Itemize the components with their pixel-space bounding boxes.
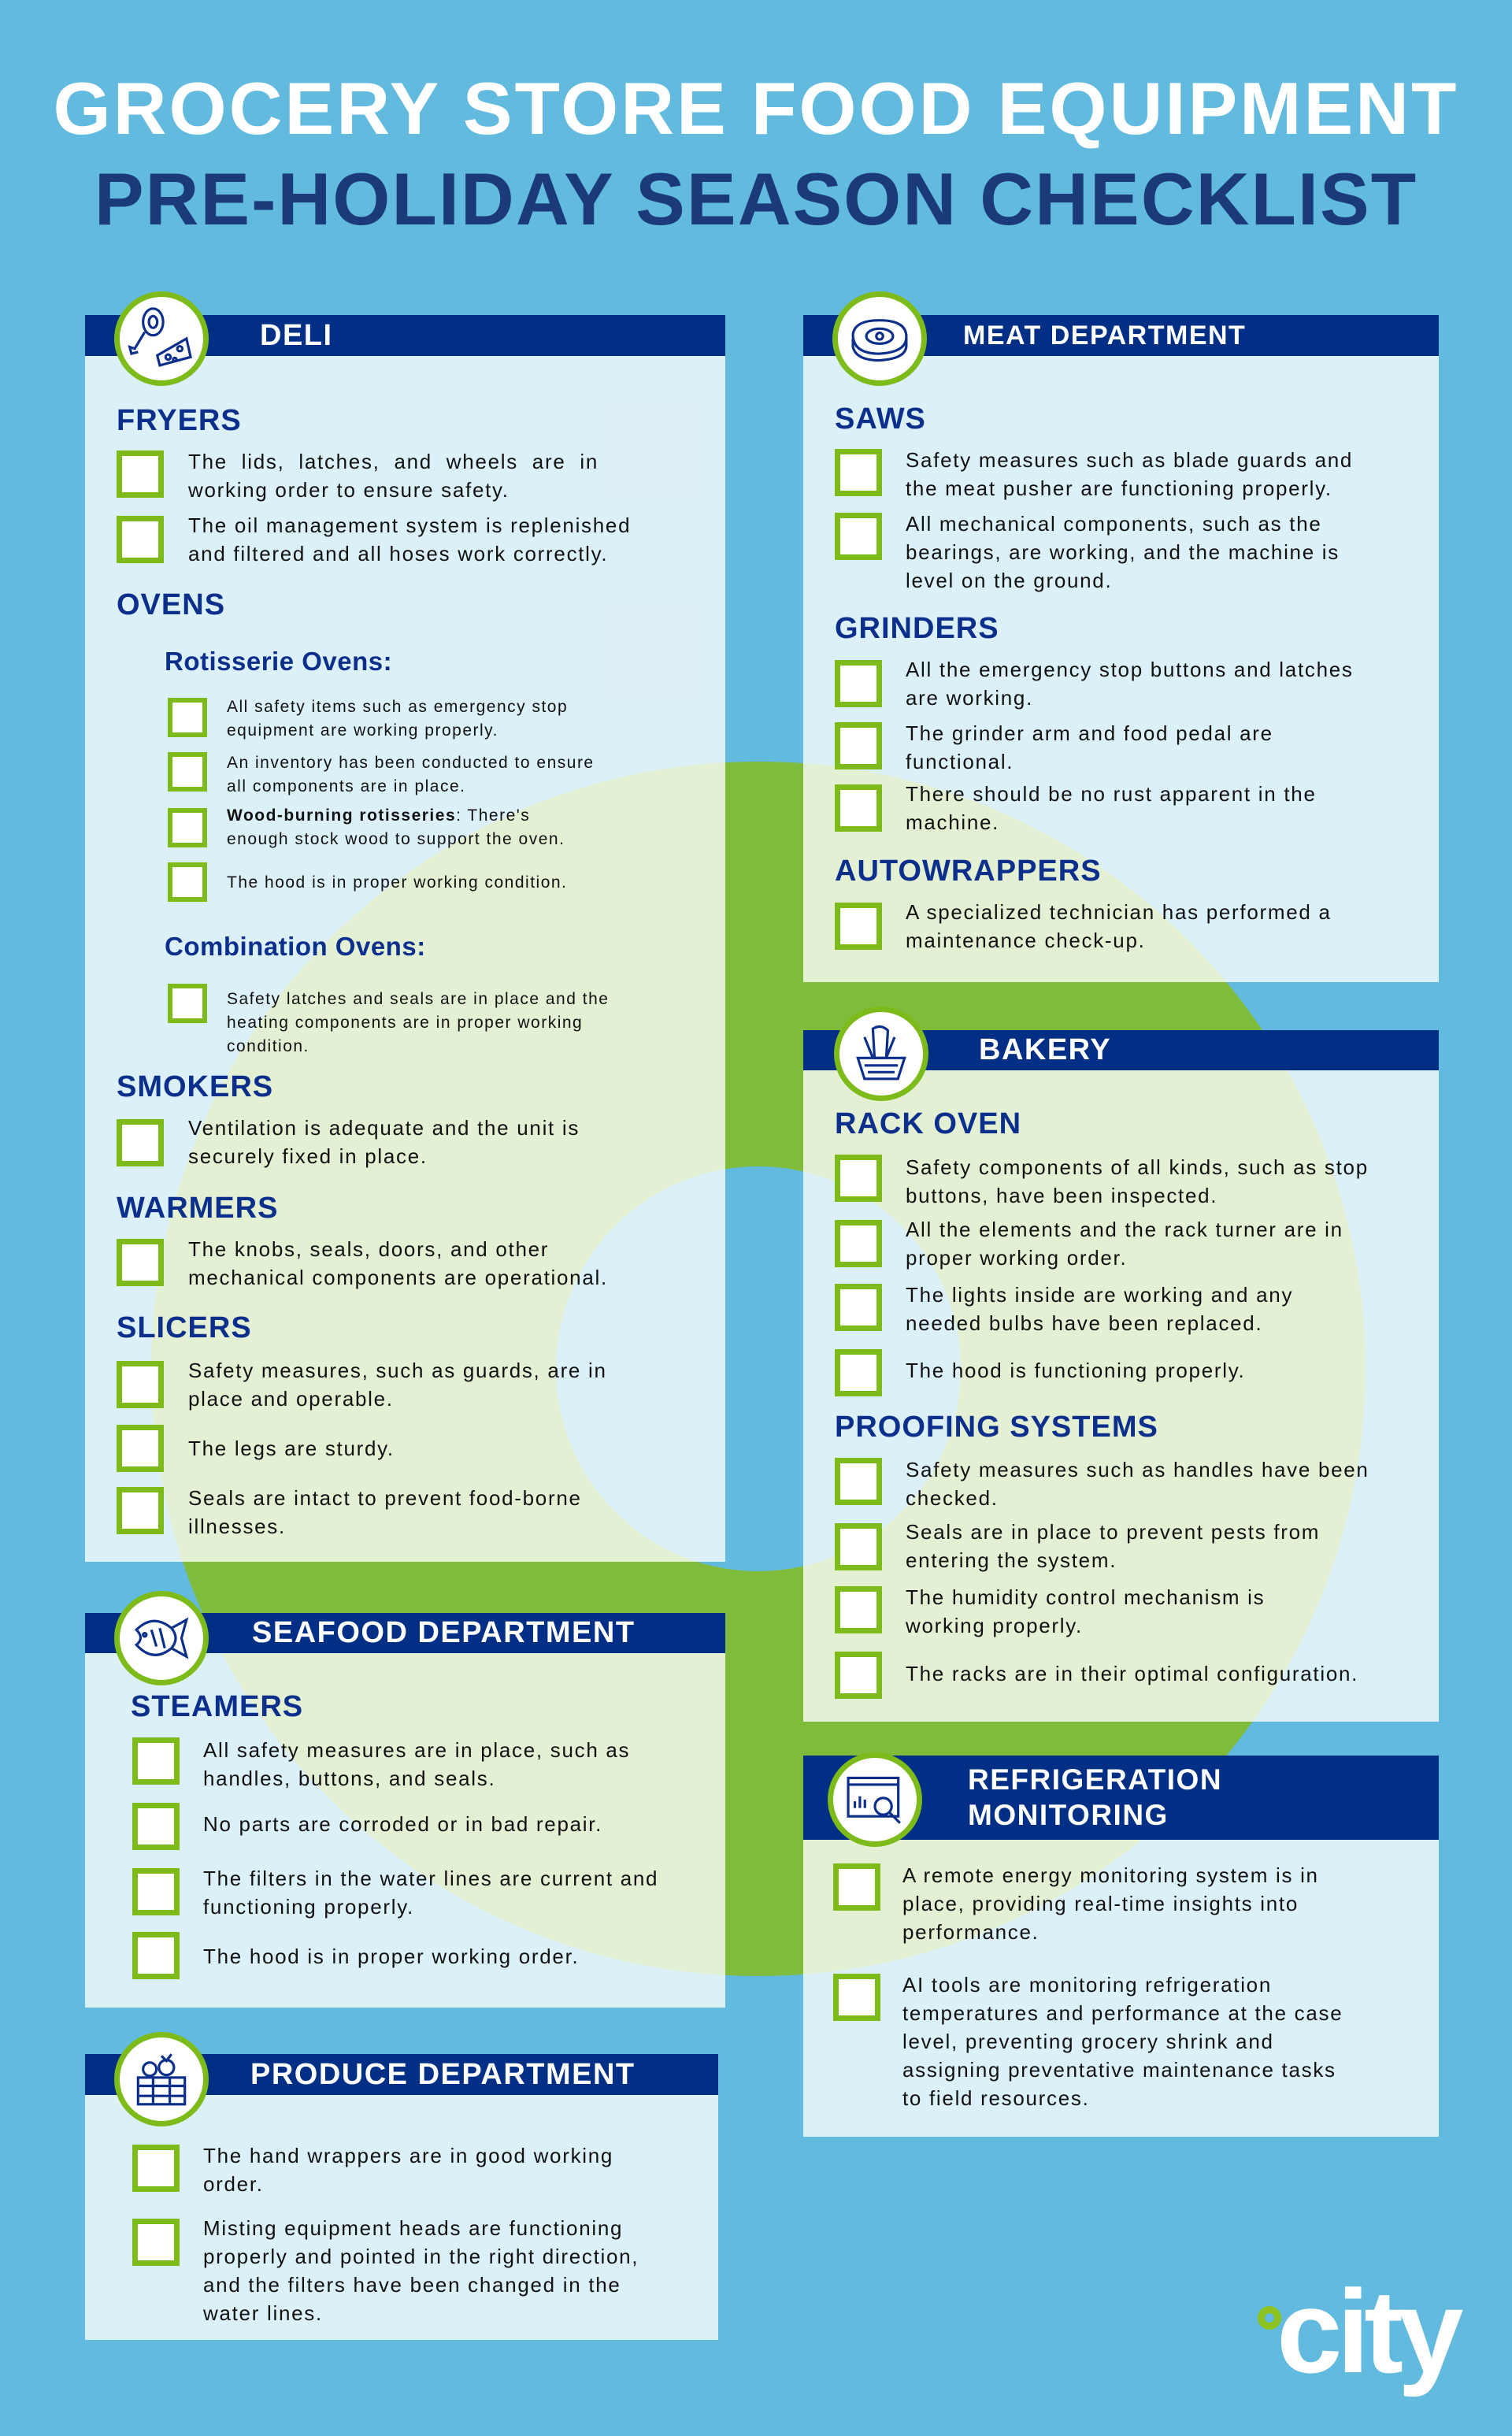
icon: ham and cheese (114, 291, 209, 386)
text: level on the ground. (906, 569, 1112, 592)
panel: seafood department (85, 1591, 725, 2008)
section: slicers: SLICERS (117, 1311, 252, 1344)
text: All safety measures are in place, such as (203, 1738, 630, 1762)
panel: refrigeration monitoring (803, 1752, 1439, 2137)
text: SEAFOOD DEPARTMENT (252, 1616, 636, 1649)
text: to field resources. (902, 2086, 1090, 2110)
text: Combination Ovens: (165, 932, 426, 961)
text: All mechanical components, such as the (906, 512, 1322, 536)
text: Misting equipment heads are functioning (203, 2216, 623, 2240)
text: RACK OVEN (835, 1107, 1021, 1140)
text: The racks are in their optimal configuration. (906, 1662, 1358, 1685)
icon: monitoring screen (828, 1752, 922, 1847)
text: heating components are in proper working (227, 1014, 583, 1032)
text: The knobs, seals, doors, and other (188, 1237, 549, 1261)
text: Rotisserie Ovens: (165, 647, 392, 676)
text: Safety measures such as handles have been (906, 1458, 1369, 1481)
text: checked. (906, 1486, 999, 1510)
text: water lines. (203, 2301, 323, 2325)
text: Safety measures such as blade guards and (906, 448, 1353, 472)
section: fryers: FRYERS (117, 404, 242, 437)
text: BAKERY (979, 1033, 1111, 1066)
text: all components are in place. (227, 777, 466, 795)
text: The hood is in proper working condition. (227, 873, 567, 892)
text: The lights inside are working and any (906, 1283, 1293, 1307)
text: place, providing real-time insights into (902, 1892, 1299, 1915)
text: Ventilation is adequate and the unit is (188, 1116, 580, 1140)
text: Seals are in place to prevent pests from (906, 1520, 1320, 1544)
text: REFRIGERATION (968, 1763, 1222, 1796)
logo: city: city (1277, 2265, 1458, 2397)
text: Wood-burning rotisseries: There's (227, 806, 530, 825)
text: All safety items such as emergency stop (227, 698, 568, 716)
text: bearings, are working, and the machine is (906, 540, 1340, 564)
text: mechanical components are operational. (188, 1266, 608, 1289)
text: performance. (902, 1920, 1040, 1944)
text: condition. (227, 1037, 309, 1055)
text: working properly. (906, 1614, 1083, 1637)
text: The hand wrappers are in good working (203, 2144, 613, 2167)
text: and the filters have been changed in the (203, 2273, 621, 2297)
panel: bakery (803, 1007, 1439, 1722)
text: Seals are intact to prevent food-borne (188, 1486, 582, 1510)
text: are working. (906, 686, 1033, 710)
text: SAWS (835, 402, 926, 436)
text: functioning properly. (203, 1895, 414, 1919)
section: warmers: WARMERS (117, 1192, 278, 1225)
panel: deli (85, 291, 725, 1562)
text: GRINDERS (835, 612, 999, 645)
icon: produce crate (114, 2032, 209, 2126)
text: illnesses. (188, 1515, 286, 1538)
text: assigning preventative maintenance tasks (902, 2058, 1336, 2082)
text: An inventory has been conducted to ensure (227, 754, 595, 772)
text: Safety components of all kinds, such as stop (906, 1155, 1369, 1179)
text: The grinder arm and food pedal are (906, 721, 1273, 745)
text: No parts are corroded or in bad repair. (203, 1812, 602, 1836)
text: There should be no rust apparent in the (906, 782, 1317, 806)
text: entering the system. (906, 1548, 1117, 1572)
text: working order to ensure safety. (188, 478, 510, 502)
text: Safety latches and seals are in place and the (227, 990, 609, 1008)
icon: fish (114, 1591, 209, 1685)
text: The humidity control mechanism is (906, 1585, 1265, 1609)
text: The hood is functioning properly. (906, 1359, 1245, 1382)
text: securely fixed in place. (188, 1144, 428, 1168)
text: The oil management system is replenished (188, 514, 631, 537)
text: PROOFING SYSTEMS (835, 1411, 1158, 1444)
text: functional. (906, 750, 1014, 773)
title: PRE-HOLIDAY SEASON CHECKLIST (94, 158, 1418, 240)
text: AUTOWRAPPERS (835, 855, 1102, 888)
text: handles, buttons, and seals. (203, 1767, 495, 1790)
text: the meat pusher are functioning properly. (906, 476, 1332, 500)
text: Safety measures, such as guards, are in (188, 1359, 607, 1382)
text: STEAMERS (131, 1690, 303, 1723)
text: proper working order. (906, 1246, 1127, 1270)
title: GROCERY STORE FOOD EQUIPMENT (54, 67, 1458, 150)
text: properly and pointed in the right direction, (203, 2245, 639, 2268)
text: equipment are working properly. (227, 721, 498, 740)
title (54, 67, 1458, 240)
section: smokers: SMOKERS (117, 1070, 273, 1103)
panel: produce department (85, 2032, 718, 2340)
text: needed bulbs have been replaced. (906, 1311, 1262, 1335)
text: place and operable. (188, 1387, 394, 1411)
text: MEAT DEPARTMENT (963, 321, 1246, 350)
text: DELI (260, 319, 333, 352)
text: The lids, latches, and wheels are in (188, 450, 598, 473)
text: order. (203, 2172, 264, 2196)
text: The filters in the water lines are current and (203, 1867, 658, 1890)
text: All the emergency stop buttons and latches (906, 658, 1354, 681)
text: PRODUCE DEPARTMENT (250, 2058, 636, 2091)
icon: steak (832, 291, 927, 386)
section: ovens: OVENS (117, 588, 225, 621)
text: maintenance check-up. (906, 929, 1146, 952)
text: enough stock wood to support the oven. (227, 830, 565, 848)
text: The legs are sturdy. (188, 1437, 395, 1460)
text: MONITORING (968, 1799, 1169, 1831)
text: buttons, have been inspected. (906, 1184, 1217, 1207)
text: and filtered and all hoses work correctly. (188, 542, 608, 565)
icon: bread basket (834, 1007, 928, 1101)
text: A specialized technician has performed a (906, 900, 1332, 924)
text: machine. (906, 810, 999, 834)
text: The hood is in proper working order. (203, 1945, 579, 1968)
text: A remote energy monitoring system is in (902, 1863, 1319, 1887)
text: temperatures and performance at the case (902, 2001, 1343, 2025)
text: All the elements and the rack turner are in (906, 1218, 1343, 1241)
text: level, preventing grocery shrink and (902, 2030, 1274, 2053)
panel: meat department (803, 291, 1439, 982)
text: AI tools are monitoring refrigeration (902, 1973, 1272, 1997)
